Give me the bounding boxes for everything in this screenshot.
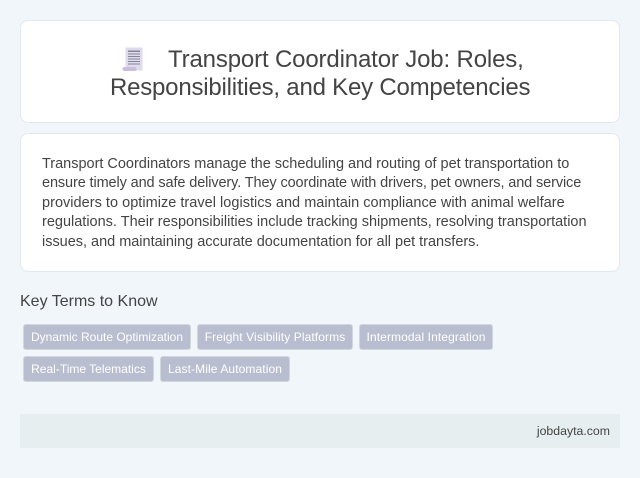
tag: Dynamic Route Optimization: [31, 330, 183, 344]
description text: ensure timely and safe delivery. They coordinate with drivers, pet owners, and service: [42, 175, 581, 191]
title line 2: Responsibilities, and Key Competencies: [110, 74, 530, 101]
panel: title card: [20, 20, 620, 123]
tag: Real-Time Telematics: [31, 362, 146, 376]
description text: providers to optimize travel logistics and maintain compliance with animal welfare: [42, 195, 565, 211]
tag: [197, 324, 353, 350]
title line 1: Transport Coordinator Job: Roles,: [168, 46, 524, 73]
tag: Last-Mile Automation: [168, 362, 282, 376]
heading: key terms: Key Terms to Know: [20, 293, 158, 310]
description text: [42, 156, 587, 250]
tag: [23, 324, 191, 350]
tag list: [23, 324, 493, 382]
tag: Intermodal Integration: [367, 330, 485, 344]
footer site name: jobdayta.com: [537, 424, 610, 438]
tag: [23, 356, 154, 382]
tag: [160, 356, 290, 382]
tag: [359, 324, 493, 350]
tag: Freight Visibility Platforms: [205, 330, 345, 344]
description text: Transport Coordinators manage the scheduling and routing of pet transportation to: [42, 156, 569, 172]
icon: document receipt: [122, 48, 142, 71]
description text: issues, and maintaining accurate documentation for all pet transfers.: [42, 234, 479, 250]
description text: regulations. Their responsibilities include tracking shipments, resolving transportation: [42, 214, 587, 230]
panel: description card: [20, 133, 620, 272]
footer bar: [20, 414, 620, 448]
